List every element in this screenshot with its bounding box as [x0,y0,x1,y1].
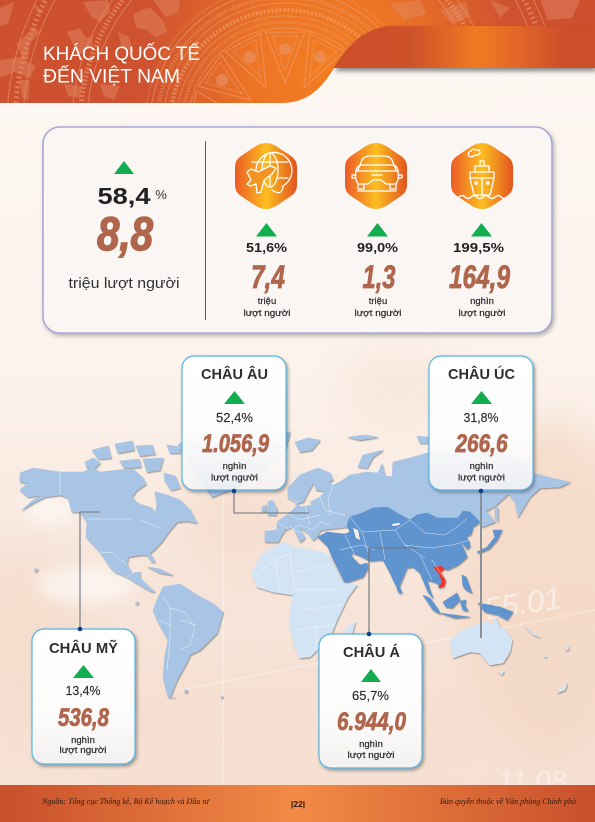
air travel: 7,4 [251,259,285,295]
panel: Châu Mỹ: lượt người [60,745,106,756]
panel: Châu Úc: CHÂU ÚC [448,365,515,383]
title [43,43,200,88]
panel: Châu Á: CHÂU Á [343,643,400,661]
footer [0,785,595,822]
leader line: Châu Á [369,548,416,634]
panel: Châu Âu: 52,4% [216,411,253,425]
leader line: Châu Úc [480,491,482,638]
panel: Châu Á: 6.944,0 [337,708,406,736]
leader line: Châu Mỹ [80,512,100,629]
oceania [450,617,569,693]
europe and russia [262,435,570,542]
icon: ship [451,143,513,209]
title: ĐẾN VIỆT NAM [43,66,180,88]
panel: Châu Âu [182,356,286,493]
sea travel: 164,9 [449,259,510,295]
leader line: Châu Âu [234,491,309,513]
panel: Châu Mỹ: nghìn [71,735,95,746]
africa [252,542,357,658]
caspian sea [353,528,360,540]
background chart numbers: 05.52 [486,67,546,94]
total arrivals: % [155,187,167,202]
map borders [60,472,470,670]
page number: |22| [291,799,305,809]
drum heart marks [216,43,326,86]
panel: Châu Úc [429,356,533,493]
panel: Châu Âu: lượt người [211,472,258,484]
background chart numbers: 14 [522,237,549,264]
total arrivals [68,161,180,292]
sea travel: 199,5% [453,240,505,255]
title: KHÁCH QUỐC TẾ [43,43,200,65]
panel: Châu Á: 65,7% [352,689,389,703]
air travel [235,143,297,319]
header banner [0,0,595,103]
panel: Châu Mỹ: 536,8 [58,704,109,732]
vietnam [433,566,446,588]
total arrivals: 8,8 [97,207,154,260]
divider [204,141,206,320]
panel: Châu Mỹ: CHÂU MỸ [49,639,118,657]
road travel: 99,0% [357,240,398,255]
drum figures [0,0,580,100]
road travel [345,143,407,319]
background chart numbers: 11.08 [498,765,566,796]
total arrivals: triệu lượt người [68,275,180,292]
orange ribbon [334,26,595,68]
road travel: lượt người [354,308,402,319]
sea travel [449,143,513,319]
panel: Châu Á [319,632,422,768]
source note: Nguồn: Tổng cục Thống kê, Bộ Kế hoạch và Đầu tư [41,797,210,806]
panel: Châu Mỹ [32,627,135,764]
sea travel: lượt người [458,308,506,319]
panel: Châu Âu: nghìn [223,461,246,472]
road travel: triệu [369,296,387,307]
panel: Châu Âu: 1.056,9 [202,430,269,458]
air travel: lượt người [244,308,290,319]
americas [20,427,290,698]
aral sea [392,523,400,526]
panel: Châu Mỹ: 13,4% [66,684,100,698]
panel: Châu Á: lượt người [348,750,394,761]
panel: Châu Úc: lượt người [458,472,505,484]
copyright note: Bản quyền thuộc về Văn phòng Chính phủ [440,797,576,806]
panel: Châu Úc: nghìn [470,461,493,472]
panel: Châu Âu: CHÂU ÂU [201,365,268,383]
star triangles [194,32,346,103]
road travel: 1,3 [362,259,396,295]
panel: Châu Úc: 31,8% [464,411,498,425]
background chart numbers: 55.01 [482,580,564,627]
panel: total arrivals and means of transport [43,127,552,333]
air travel: 51,6% [246,240,287,255]
asia [318,507,513,620]
world map [20,427,570,698]
total arrivals: 58,4 [98,183,151,209]
sea travel: nghìn [470,296,494,307]
air travel: triệu [258,296,276,307]
panel: Châu Úc: 266,6 [455,430,508,458]
background chart numbers [482,67,566,796]
panel: Châu Á: nghìn [359,739,383,750]
icon: plane and globe [235,143,297,209]
icon: car [345,143,407,209]
drum pattern band [0,0,595,103]
